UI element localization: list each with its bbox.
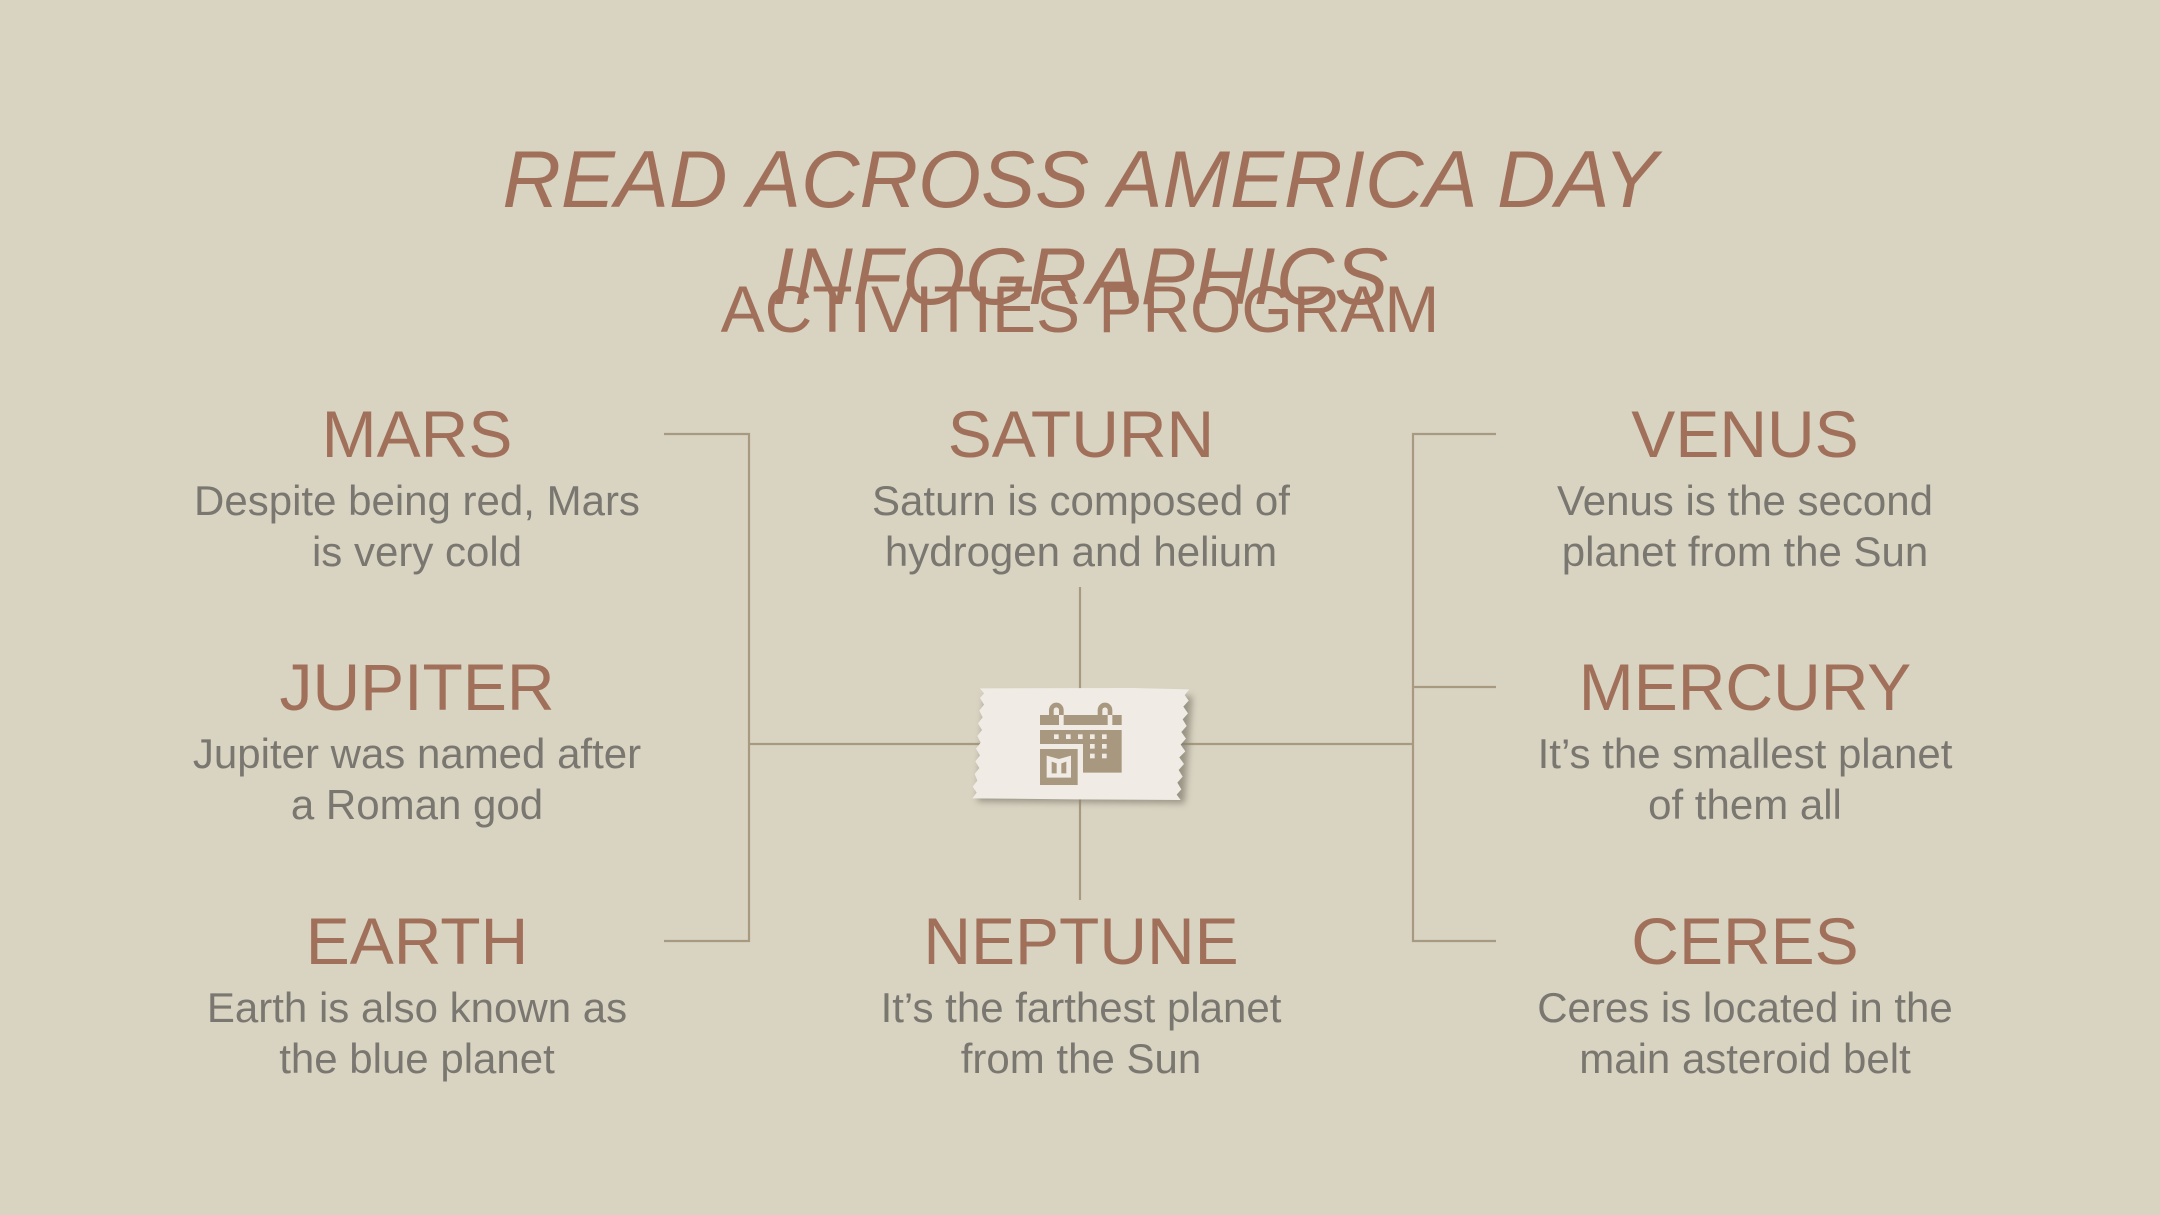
panel: Saturn: SATURN — [948, 397, 1214, 471]
title: READ ACROSS AMERICA DAY — [502, 135, 1658, 225]
panel: Venus: planet from the Sun — [1562, 528, 1928, 575]
panel: Earth — [207, 904, 627, 1082]
panel: Ceres: Ceres is located in the — [1537, 984, 1953, 1031]
panel: Mars — [194, 397, 640, 575]
panel: Earth: EARTH — [306, 904, 528, 978]
panel: Neptune: It’s the farthest planet — [881, 984, 1281, 1031]
panel: Earth: the blue planet — [279, 1035, 555, 1082]
panel: Mercury — [1538, 650, 1952, 828]
title: INFOGRAPHICS — [772, 232, 1388, 322]
panel: Neptune: NEPTUNE — [923, 904, 1239, 978]
panel: Venus: VENUS — [1631, 397, 1859, 471]
panel: Neptune — [881, 904, 1282, 1082]
panel: Jupiter: Jupiter was named after — [193, 730, 641, 777]
subtitle: ACTIVITIES PROGRAM — [721, 272, 1439, 346]
panel: Mars: Despite being red, Mars — [194, 477, 640, 524]
panel: Mars: is very cold — [312, 528, 522, 575]
panel: Mercury: MERCURY — [1579, 650, 1911, 724]
panel: Ceres — [1537, 904, 1953, 1082]
panel: Ceres: CERES — [1631, 904, 1859, 978]
panel: Mercury: of them all — [1648, 781, 1842, 828]
panel: Venus — [1557, 397, 1933, 575]
panel: Mercury: It’s the smallest planet — [1538, 730, 1952, 777]
panel: Saturn — [872, 397, 1290, 575]
panel: Jupiter: JUPITER — [279, 650, 555, 724]
panel: Neptune: from the Sun — [961, 1035, 1201, 1082]
panel: Saturn: hydrogen and helium — [885, 528, 1277, 575]
title — [502, 135, 1662, 322]
panel: Jupiter: a Roman god — [291, 781, 543, 828]
icon: calendar with book — [1040, 703, 1122, 785]
panel: Mars: MARS — [322, 397, 512, 471]
panel: Jupiter — [193, 650, 641, 828]
panel: Saturn: Saturn is composed of — [872, 477, 1290, 524]
panel: Venus: Venus is the second — [1557, 477, 1933, 524]
panel: Ceres: main asteroid belt — [1579, 1035, 1911, 1082]
panel: Earth: Earth is also known as — [207, 984, 627, 1031]
